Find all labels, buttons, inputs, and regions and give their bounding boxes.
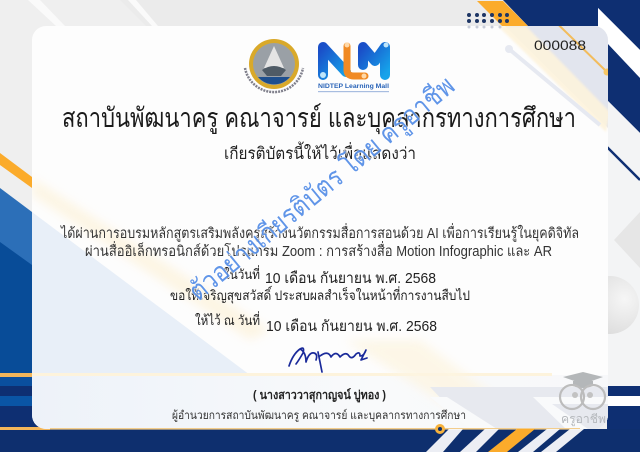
icon: NLM logo (318, 42, 389, 92)
training date (224, 265, 436, 287)
course description: ผ่านสื่ออิเล็กทรอนิกส์ด้วยโปรแกรม Zoom : การสร้างสื่อ Motion Infographic และ AR (85, 241, 552, 260)
subtitle: เกียรติบัตรนี้ให้ไว้เพื่อแสดงว่า (224, 141, 416, 163)
certificate number: 000088 (534, 38, 586, 53)
top orange wedge (477, 1, 528, 26)
bottom chevron stripes (426, 429, 584, 452)
icon: NLM logo: NIDTEP Learning Mall (318, 83, 389, 90)
left blue bands (0, 153, 50, 428)
training date: 10 เดือน กันยายน พ.ศ. 2568 (265, 270, 436, 287)
signatory role: ผู้อำนวยการสถาบันพัฒนาครู คณาจารย์ และบุคลากรทางการศึกษา (172, 408, 466, 422)
right side shapes (503, 0, 640, 429)
bottom navy band (0, 427, 640, 452)
signature (289, 348, 367, 372)
training date: ในวันที่ (224, 265, 260, 282)
icon: owl logo (560, 372, 606, 427)
icon: owl logo: ครูอาชีพ (561, 412, 606, 427)
issue date (195, 311, 437, 335)
issue date: 10 เดือน กันยายน พ.ศ. 2568 (266, 318, 437, 335)
icon: bottom orange ring (435, 424, 445, 434)
signatory name: ( นางสาววาสุกาญจน์ บู่ทอง ) (253, 388, 386, 403)
course description (60, 223, 579, 260)
watermark: ตัวอย่างเกียรติบัตร โดย ครูอาชีพ (183, 70, 461, 307)
blessing line: ขอให้เจริญสุขสวัสดิ์ ประสบผลสำเร็จในหน้าที่การงานสืบไป (170, 285, 470, 304)
dot grid decoration (467, 13, 509, 28)
issue date: ให้ไว้ ณ วันที่ (195, 311, 260, 328)
orange baseline of card (50, 428, 580, 430)
icon: institute seal (245, 39, 303, 92)
